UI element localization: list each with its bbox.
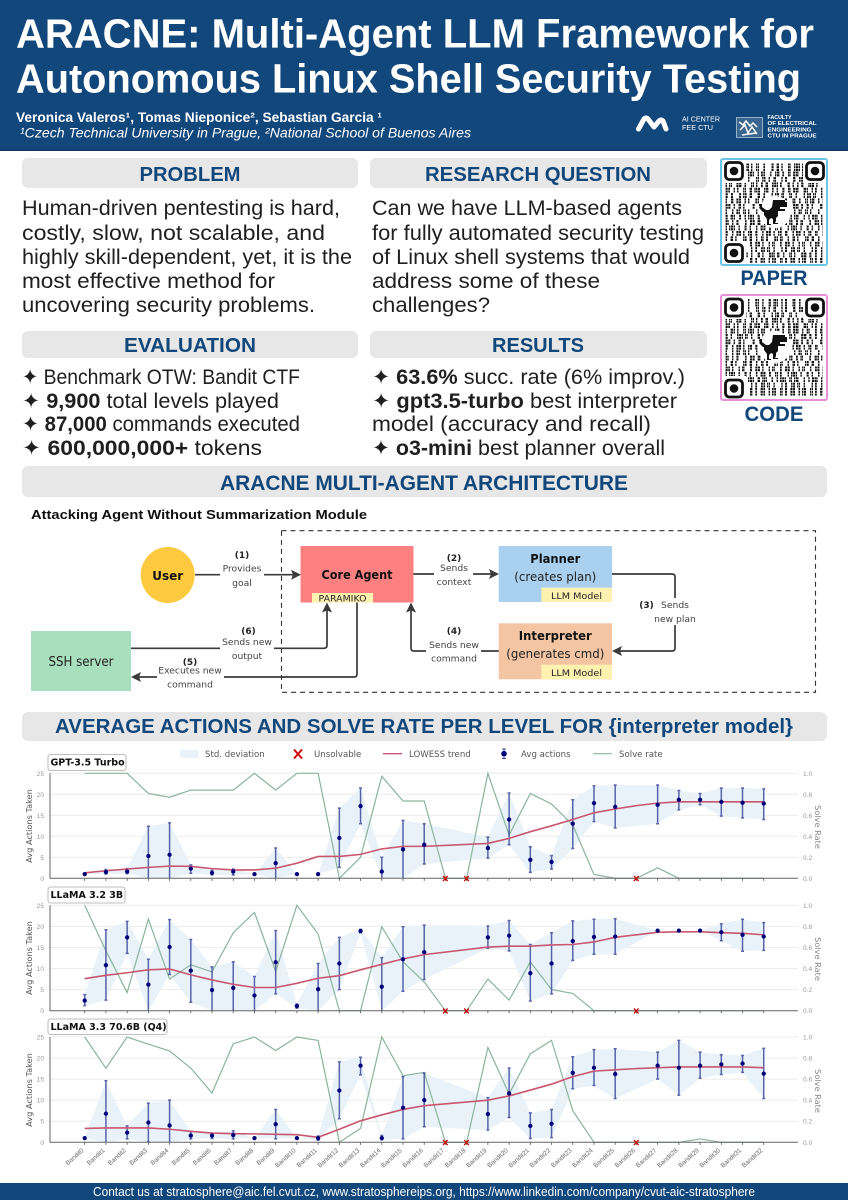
unsolvable markers [443, 876, 639, 881]
x axis labels: Bandit0 [65, 1147, 86, 1167]
problem text [22, 197, 352, 317]
chart title: LLaMA 3.3 70.6B (Q4) [50, 1022, 167, 1033]
arrow: interpreter to core agent [406, 602, 499, 664]
arrow: core agent to planner: Sends [440, 563, 468, 574]
lowess trend [85, 1067, 764, 1137]
node: planner: LLM Model [551, 591, 602, 602]
arrow: core agent command to ssh server: (5) [183, 658, 197, 668]
logo: faculty of electrical engineering: ENGINEERING [768, 128, 812, 134]
y axis labels: 0 [40, 876, 44, 883]
y axis labels: 15 [37, 945, 44, 952]
y axis labels [37, 1034, 812, 1147]
arrow: core agent command to ssh server [131, 602, 357, 690]
chart title [48, 887, 125, 903]
research question text [372, 197, 704, 317]
chart legend: Unsolvable [314, 750, 361, 760]
evaluation list: ✦ 87,000 commands executed [22, 413, 300, 436]
arrow: core agent command to ssh server: command [167, 680, 213, 690]
arrow: planner to interpreter: new plan [654, 614, 696, 625]
heading: architecture [22, 466, 827, 497]
problem text: uncovering security problems. [22, 294, 315, 317]
research question text: of Linux shell systems that would [372, 246, 690, 269]
arrow: core agent to planner [414, 554, 499, 588]
authors: Veronica Valeros¹, Tomas Nieponice², Sebastian Garcia ¹ [16, 110, 383, 125]
chart title [48, 754, 126, 770]
x axis labels: Bandit20 [486, 1147, 510, 1169]
y axis labels: 0.4 [803, 1098, 812, 1105]
y axis labels: 15 [37, 1077, 44, 1084]
node: interpreter: (generates cmd) [506, 646, 604, 661]
icon: dinosaur [760, 335, 787, 360]
results list [372, 366, 685, 460]
chart: LLaMA 3.3 70.6B (Q4): Solve Rate [813, 1069, 823, 1113]
node: planner: Planner [530, 551, 581, 566]
y axis labels: 0.0 [803, 1008, 812, 1015]
arrow: core agent command to ssh server: Executes new [158, 666, 222, 676]
arrow: interpreter to core agent: command [431, 654, 477, 664]
panel: results [370, 331, 707, 460]
diagram subtitle: Attacking Agent Without Summarization Module [31, 507, 367, 522]
std deviation band [85, 785, 764, 878]
y axis labels: 10 [37, 966, 44, 973]
research question text: address some of these [372, 270, 600, 293]
x axis labels: Bandit19 [465, 1147, 489, 1169]
unsolvable markers [443, 1008, 639, 1013]
y axis labels: 25 [37, 1034, 44, 1042]
results list: ✦ gpt3.5-turbo best interpreter [372, 390, 677, 413]
x axis labels: Bandit18 [444, 1147, 468, 1169]
x axis labels: Bandit27 [635, 1147, 659, 1169]
logo: AI center: AI CENTER [682, 116, 720, 124]
y axis labels: 15 [37, 813, 44, 820]
x axis labels: Bandit13 [338, 1147, 362, 1169]
results list: ✦ 63.6% succ. rate (6% improv.) [372, 366, 685, 389]
problem text: costly, slow, not scalable, and [22, 222, 325, 245]
y axis labels: 0.8 [803, 792, 812, 799]
chart legend: Avg actions [521, 750, 571, 760]
arrow: core agent to planner: (2) [447, 554, 461, 564]
panel: problem [22, 158, 358, 317]
chart title [48, 1019, 167, 1034]
panel: evaluation [22, 331, 358, 460]
node: interpreter [499, 623, 612, 679]
heading: average actions and solve rate: AVERAGE ACTIONS AND SOLVE RATE PER LEVEL FOR {interpreter model} [55, 716, 793, 738]
x axis labels: Bandit22 [529, 1147, 552, 1169]
arrow: ssh server output to core agent [131, 602, 332, 662]
axis ticks [85, 1011, 764, 1013]
y axis labels: 0.4 [803, 966, 812, 973]
results list: ✦ o3-mini best planner overall [372, 437, 665, 460]
x axis labels: Bandit32 [741, 1147, 765, 1169]
header banner [0, 0, 848, 151]
x axis labels: Bandit11 [296, 1147, 319, 1169]
x axis labels: Bandit21 [508, 1147, 531, 1169]
QR code: code [721, 295, 827, 400]
y axis labels: 5 [40, 1119, 44, 1126]
x axis labels: Bandit29 [677, 1147, 701, 1169]
QR code: paper [721, 159, 827, 265]
x axis labels: Bandit14 [359, 1147, 383, 1169]
y axis labels: 0.4 [803, 834, 812, 841]
y axis labels: 20 [37, 924, 44, 931]
node: planner [499, 546, 612, 602]
x axis labels: Bandit10 [274, 1147, 298, 1169]
agent boundary [282, 531, 816, 692]
node: interpreter: Interpreter [519, 628, 593, 643]
y axis labels: 1.0 [803, 771, 812, 778]
arrow: user to core agent [195, 551, 301, 589]
chart title: GPT-3.5 Turbo [50, 758, 125, 768]
panel: research question: RESEARCH QUESTION [425, 163, 651, 186]
footer: Contact us at stratosphere@aic.fel.cvut.cz, www.stratosphereips.org, https://www.linkedin.com/company/cvut-aic-stratosphere [93, 1184, 755, 1199]
y axis labels: 25 [37, 771, 44, 778]
x axis labels: Bandit16 [401, 1147, 425, 1169]
x axis labels: Bandit6 [192, 1147, 213, 1167]
y axis labels: 0.8 [803, 1056, 812, 1063]
logo: faculty of electrical engineering: OF ELECTRICAL [768, 121, 817, 127]
arrow: ssh server output to core agent: Sends new [222, 637, 272, 648]
y axis labels: 5 [40, 987, 44, 994]
node: core agent [300, 546, 414, 604]
panel: results: RESULTS [492, 334, 584, 357]
avg action points [85, 1064, 764, 1138]
x axis labels: Bandit24 [571, 1147, 595, 1169]
logo: faculty of electrical engineering: CTU IN PRAGUE [768, 134, 817, 140]
research question text: challenges? [372, 294, 490, 317]
error bars [104, 1040, 765, 1142]
y axis labels: 10 [37, 1098, 44, 1105]
y axis labels: 0 [40, 1140, 44, 1147]
x axis labels: Bandit5 [171, 1147, 192, 1167]
error bars [83, 919, 765, 1011]
y axis labels: 0.0 [803, 876, 812, 883]
y axis labels: 0.2 [803, 987, 812, 994]
authors [16, 110, 471, 140]
panel: research question [370, 158, 707, 317]
y axis labels: 0.2 [803, 1119, 812, 1126]
x axis labels: Bandit26 [614, 1147, 637, 1169]
y axis labels: 0.2 [803, 855, 812, 862]
chart legend [180, 749, 663, 760]
arrow: interpreter to core agent: (4) [447, 627, 461, 637]
chart: LLaMA 3.2 3B [24, 887, 823, 1015]
title [16, 10, 814, 102]
chart: GPT-3.5 Turbo: Solve Rate [813, 805, 823, 849]
axes [50, 905, 798, 1011]
x axis labels: Bandit15 [380, 1147, 404, 1169]
logo: AI center: FEE CTU [682, 125, 713, 132]
x axis labels: Bandit28 [656, 1147, 680, 1169]
node: ssh server [31, 631, 131, 691]
arrow: ssh server output to core agent: (6) [241, 627, 256, 637]
arrow: planner to interpreter [612, 574, 696, 656]
chart legend: Std. deviation [205, 750, 265, 760]
problem text: highly skill-dependent, yet, it is the [22, 246, 352, 269]
axes [50, 773, 798, 878]
arrow: ssh server output to core agent: output [232, 651, 263, 662]
arrow: interpreter to core agent: Sends new [429, 640, 479, 651]
panel: evaluation: EVALUATION [124, 334, 256, 357]
x axis labels: Bandit25 [592, 1147, 616, 1169]
evaluation list: ✦ 9,900 total levels played [22, 390, 279, 413]
y axis labels: 0 [40, 1008, 44, 1015]
evaluation list: ✦ Benchmark OTW: Bandit CTF [22, 366, 300, 389]
evaluation list [22, 366, 300, 460]
title: ARACNE: Multi-Agent LLM Framework for [16, 10, 814, 56]
y axis labels: 0.6 [803, 1077, 812, 1084]
problem text: most effective method for [22, 270, 275, 293]
arrow: user to core agent: (1) [235, 551, 249, 561]
problem text: Human-driven pentesting is hard, [22, 197, 340, 220]
lowess trend [85, 802, 764, 873]
avg action points [85, 931, 764, 1006]
x axis labels: Bandit30 [699, 1147, 722, 1169]
x axis labels: Bandit12 [317, 1147, 340, 1169]
error bars [104, 785, 765, 878]
x axis labels: Bandit31 [720, 1147, 743, 1169]
std deviation band [85, 919, 764, 1011]
chart legend: Solve rate [619, 750, 663, 760]
unsolvable markers [443, 1140, 639, 1145]
y axis labels: 0.8 [803, 924, 812, 931]
research question text: for fully automated security testing [372, 222, 704, 245]
chart: GPT-3.5 Turbo [24, 754, 823, 883]
x axis labels: Bandit2 [107, 1147, 128, 1167]
evaluation list: ✦ 600,000,000+ tokens [22, 437, 262, 460]
arrow: planner to interpreter: Sends [661, 600, 689, 611]
x axis labels: Bandit4 [149, 1147, 171, 1167]
authors: ¹Czech Technical University in Prague, ²National School of Buenos Aires [20, 126, 471, 140]
architecture diagram [31, 507, 816, 692]
chart: LLaMA 3.3 70.6B (Q4) [24, 1019, 823, 1169]
std deviation band [85, 1040, 764, 1142]
lowess trend [85, 932, 764, 988]
chart: GPT-3.5 Turbo: Avg Actions Taken [24, 789, 34, 863]
chart legend: LOWESS trend [409, 750, 471, 760]
logo: faculty of electrical engineering [736, 115, 817, 140]
avg action points [85, 800, 764, 874]
logo: AI center [638, 116, 720, 132]
node: planner: (creates plan) [514, 569, 596, 584]
heading: architecture: ARACNE MULTI-AGENT ARCHITECTURE [220, 472, 628, 495]
y axis labels: 0.6 [803, 945, 812, 952]
axis ticks [85, 1142, 764, 1145]
node: core agent: Core Agent [322, 567, 393, 582]
node: user: User [152, 568, 184, 583]
chart title: LLaMA 3.2 3B [50, 890, 123, 901]
label: paper: PAPER [740, 267, 808, 290]
x axis labels: Bandit23 [550, 1147, 574, 1169]
solve rate line [85, 905, 764, 1011]
solve rate line [85, 773, 764, 878]
y axis labels: 10 [37, 834, 44, 841]
chart: LLaMA 3.3 70.6B (Q4): Avg Actions Taken [24, 1053, 34, 1127]
arrow: user to core agent: Provides [223, 564, 262, 574]
axes [50, 1037, 798, 1142]
y axis labels: 25 [37, 903, 44, 910]
icon: dinosaur [760, 200, 787, 225]
chart: LLaMA 3.2 3B: Avg Actions Taken [24, 921, 34, 995]
x axis labels: Bandit1 [86, 1147, 107, 1167]
x axis labels: Bandit9 [256, 1147, 277, 1167]
label: code: CODE [744, 403, 804, 426]
x axis labels: Bandit7 [213, 1147, 234, 1167]
heading: average actions and solve rate [22, 712, 827, 741]
axis ticks [85, 878, 764, 881]
logo: faculty of electrical engineering: FACULTY [768, 115, 792, 121]
x axis labels: Bandit8 [234, 1147, 255, 1167]
y axis labels [37, 771, 812, 883]
node: interpreter: LLM Model [551, 668, 602, 679]
y axis labels: 0.6 [803, 813, 812, 820]
y axis labels: 20 [37, 792, 44, 799]
y axis labels: 0.0 [803, 1140, 812, 1147]
arrow: user to core agent: goal [232, 578, 252, 589]
node: core agent: PARAMIKO [318, 594, 366, 604]
solve rate line [85, 1037, 764, 1142]
x axis labels [65, 1147, 765, 1169]
arrow: core agent to planner: context [437, 577, 472, 588]
node: ssh server: SSH server [48, 655, 114, 670]
y axis labels [37, 903, 812, 1015]
y axis labels: 1.0 [803, 1034, 812, 1042]
arrow: planner to interpreter: (3) [639, 601, 654, 611]
node: user [141, 547, 195, 603]
panel: problem: PROBLEM [140, 163, 240, 186]
title: Autonomous Linux Shell Security Testing [16, 56, 801, 102]
y axis labels: 5 [40, 855, 44, 862]
x axis labels: Bandit3 [128, 1147, 149, 1167]
y axis labels: 1.0 [803, 903, 812, 910]
results list: model (accuracy and recall) [372, 413, 651, 436]
y axis labels: 20 [37, 1056, 44, 1063]
x axis labels: Bandit17 [423, 1147, 446, 1169]
research question text: Can we have LLM-based agents [372, 197, 682, 220]
chart: LLaMA 3.2 3B: Solve Rate [813, 937, 823, 981]
